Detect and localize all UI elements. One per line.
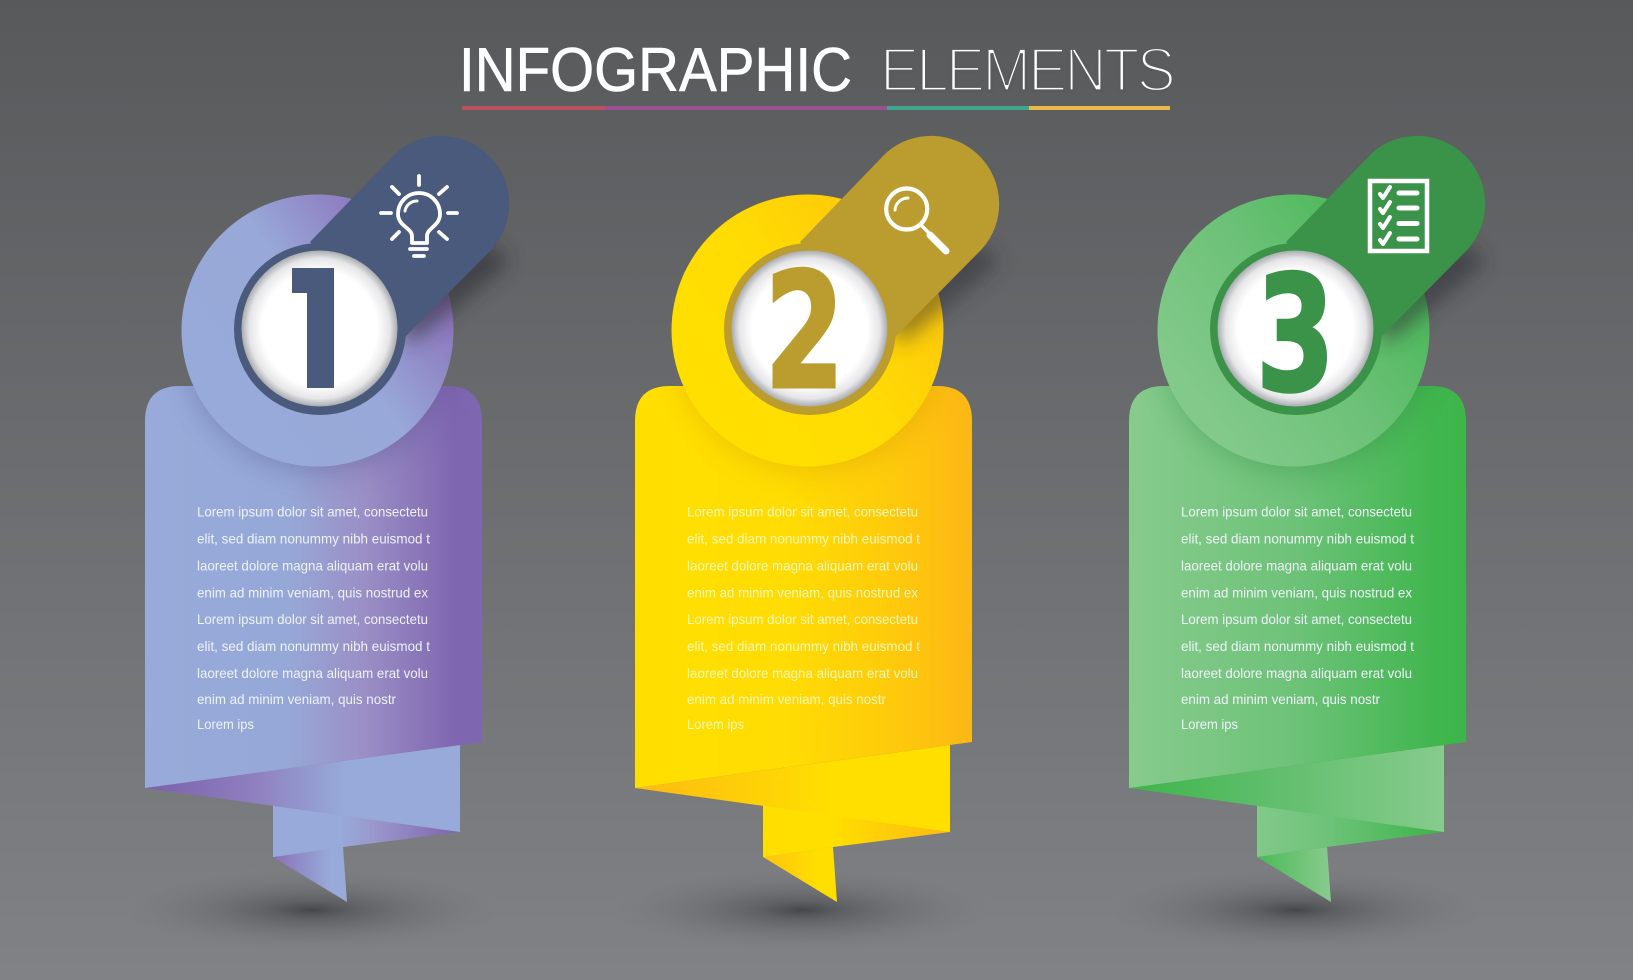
panel body 1 — [145, 386, 482, 788]
pill shadow 3 — [1376, 240, 1486, 345]
icon pill 3 — [1286, 136, 1485, 337]
body text 2: Lorem ipsum dolor sit amet, consectetu — [687, 504, 918, 520]
number ring 2 — [724, 243, 896, 415]
number 2: 2 — [764, 238, 844, 425]
title: INFOGRAPHIC — [459, 36, 852, 105]
body text 3: laoreet dolore magna aliquam erat volu — [1181, 665, 1412, 681]
number 3: 3 — [1256, 241, 1335, 428]
icon pill 1 — [310, 136, 509, 337]
body text 3: elit, sed diam nonummy nibh euismod t — [1181, 530, 1414, 546]
body text 1: elit, sed diam nonummy nibh euismod t — [197, 530, 430, 546]
body text 1: laoreet dolore magna aliquam erat volu — [197, 558, 428, 574]
icon: magnifying glass — [886, 188, 946, 251]
big circle 3 — [1158, 194, 1430, 466]
circle shadow on panel 1 — [183, 386, 449, 482]
number disc 2 — [732, 250, 888, 406]
circle shadow on panel 3 — [1161, 386, 1426, 478]
body text 1: laoreet dolore magna aliquam erat volu — [197, 665, 428, 681]
body text 3: laoreet dolore magna aliquam erat volu — [1181, 558, 1412, 574]
title: ELEMENTS — [880, 36, 1174, 105]
icon: checklist — [1370, 181, 1427, 251]
ribbon fold band 3 — [1129, 745, 1444, 832]
ground shadow 3 — [1108, 870, 1484, 950]
ribbon fold lower 3 — [1257, 800, 1444, 857]
panel: card 1 badge — [182, 136, 510, 466]
body text 1: enim ad minim veniam, quis nostr — [197, 691, 396, 707]
ribbon fold lower 2 — [763, 800, 950, 857]
number ring 1 — [234, 243, 406, 415]
body text 3: enim ad minim veniam, quis nostrud ex — [1181, 584, 1412, 600]
body text 3: Lorem ips — [1181, 716, 1238, 732]
ribbon tail light 2 — [763, 805, 833, 857]
ribbon tip 1 — [273, 847, 347, 902]
title — [459, 36, 1174, 105]
body text 3: enim ad minim veniam, quis nostr — [1181, 691, 1380, 707]
body text 2: enim ad minim veniam, quis nostr — [687, 691, 886, 707]
panel body 3 — [1129, 386, 1466, 788]
body text 1: elit, sed diam nonummy nibh euismod t — [197, 638, 430, 654]
icon pill 2 — [800, 136, 999, 337]
body text 2: laoreet dolore magna aliquam erat volu — [687, 665, 918, 681]
panel: card 1 body — [145, 386, 482, 936]
body text 2: Lorem ips — [687, 716, 744, 732]
body text 1 — [197, 504, 430, 732]
panel: card 3 body — [1129, 386, 1466, 936]
body text 3: Lorem ipsum dolor sit amet, consectetu — [1181, 611, 1412, 627]
ground shadow 2 — [614, 870, 990, 950]
body text 1: Lorem ipsum dolor sit amet, consectetu — [197, 611, 428, 627]
panel: card 2 badge — [672, 136, 1000, 466]
ribbon fold band 1 — [145, 745, 460, 832]
body text 2: elit, sed diam nonummy nibh euismod t — [687, 638, 920, 654]
ribbon tail light 1 — [273, 805, 343, 857]
big circle 2 — [672, 194, 944, 466]
number 1: 1 — [278, 232, 358, 433]
body text 2: enim ad minim veniam, quis nostrud ex — [687, 584, 918, 600]
ribbon tip 3 — [1257, 847, 1331, 902]
body text 2: Lorem ipsum dolor sit amet, consectetu — [687, 611, 918, 627]
number disc 3 — [1218, 250, 1374, 406]
number ring 3 — [1210, 243, 1382, 415]
ribbon fold band 2 — [635, 745, 950, 832]
body text 2 — [687, 504, 920, 732]
panel: card 2 body — [635, 386, 972, 936]
title underline — [462, 106, 1170, 110]
ribbon tip 2 — [763, 847, 837, 902]
pill shadow 1 — [400, 240, 510, 345]
body text 3: Lorem ipsum dolor sit amet, consectetu — [1181, 504, 1412, 520]
body text 3 — [1181, 504, 1414, 732]
panel body 2 — [635, 386, 972, 788]
ribbon fold lower 1 — [273, 800, 460, 857]
body text 1: Lorem ips — [197, 716, 254, 732]
icon: light bulb — [381, 176, 457, 256]
body text 2: laoreet dolore magna aliquam erat volu — [687, 558, 918, 574]
number disc 1 — [242, 250, 398, 406]
body text 1: Lorem ipsum dolor sit amet, consectetu — [197, 504, 428, 520]
body text 3: elit, sed diam nonummy nibh euismod t — [1181, 638, 1414, 654]
ground shadow 1 — [124, 870, 500, 950]
big circle 1 — [182, 194, 454, 466]
circle shadow on panel 2 — [678, 386, 938, 478]
panel: card 3 badge — [1158, 136, 1486, 466]
body text 1: enim ad minim veniam, quis nostrud ex — [197, 584, 428, 600]
pill shadow 2 — [890, 240, 1000, 345]
body text 2: elit, sed diam nonummy nibh euismod t — [687, 530, 920, 546]
